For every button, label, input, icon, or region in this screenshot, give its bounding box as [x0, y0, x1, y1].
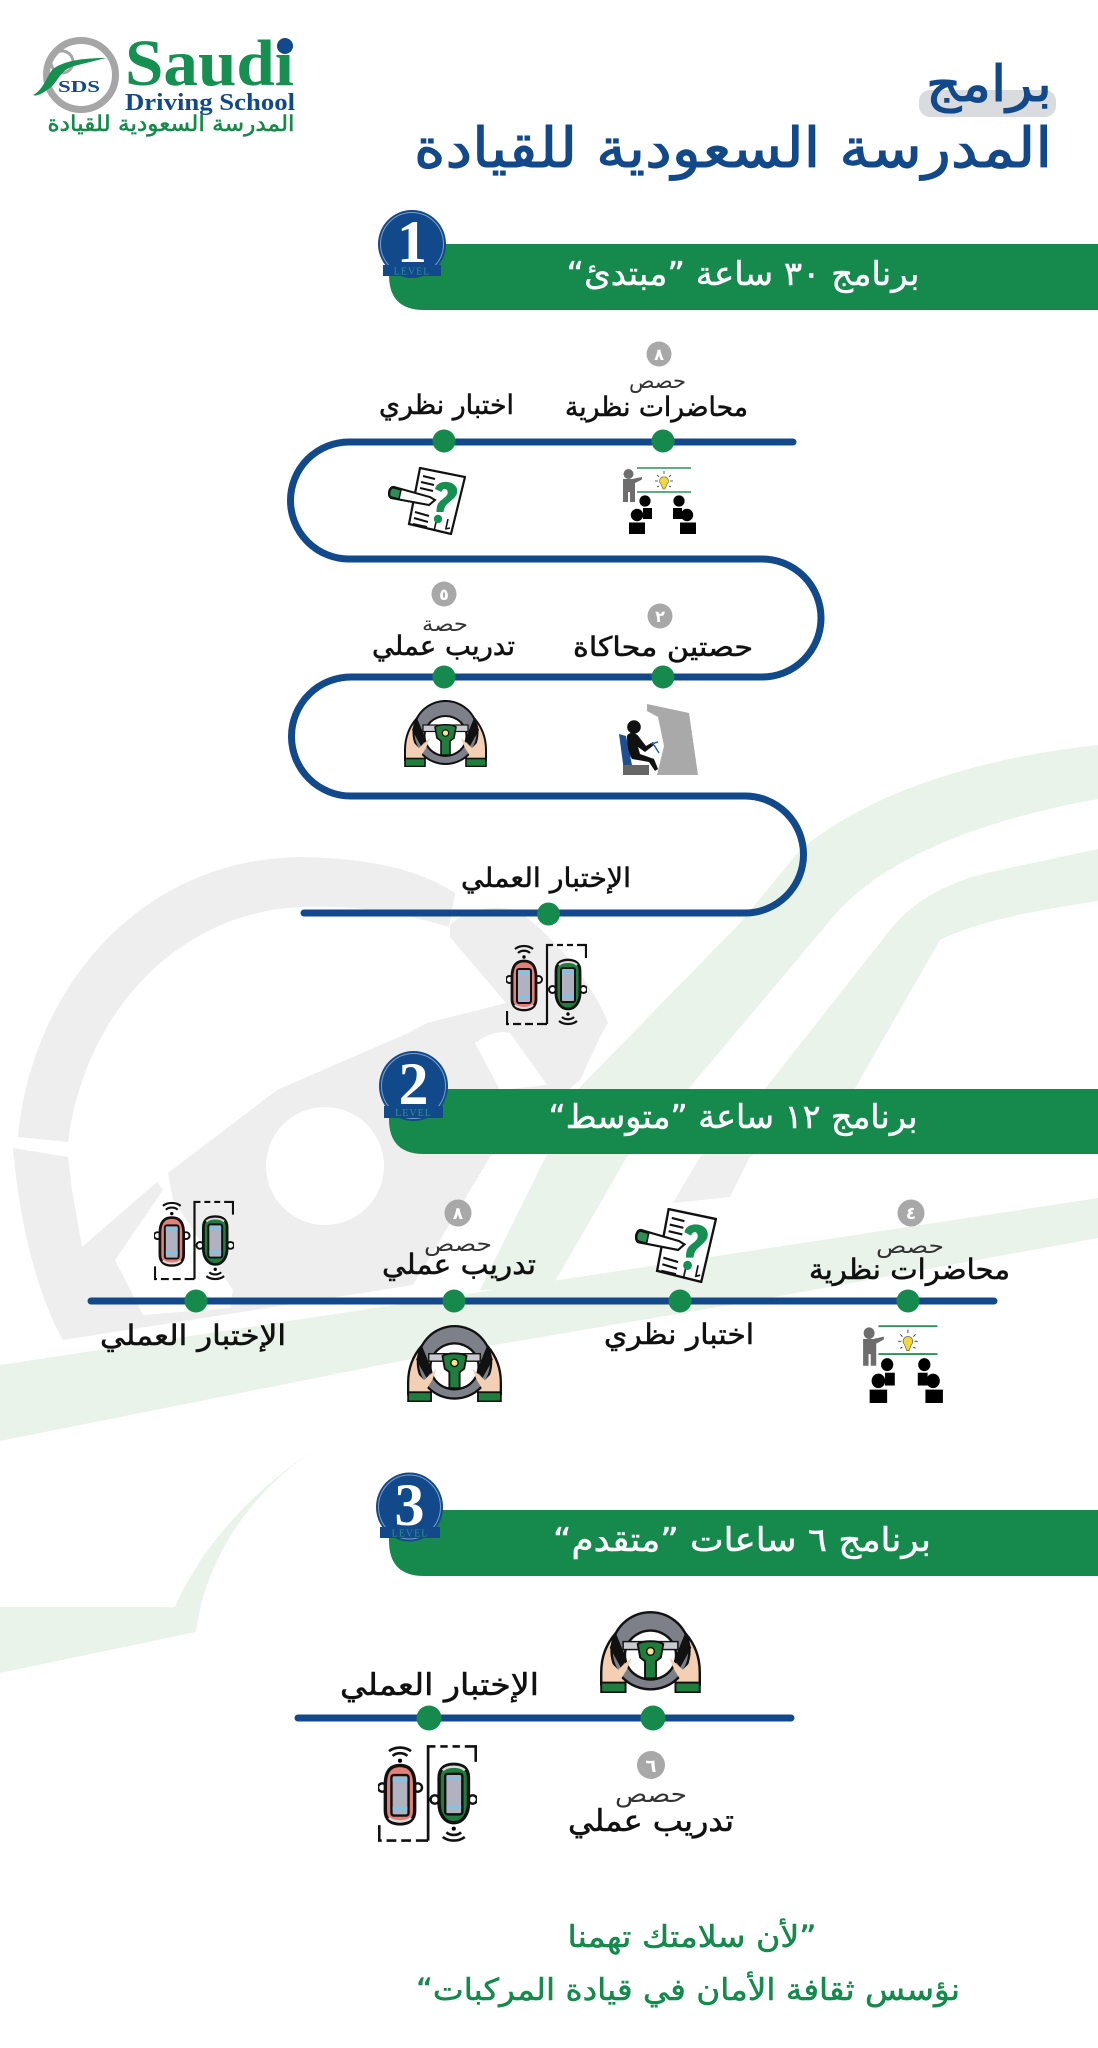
- step: practical training: تدريب عملي: [372, 631, 515, 662]
- step: theoretical test: [379, 390, 514, 534]
- step: training 8: حصص: [424, 1232, 492, 1256]
- banner: level 1: [389, 244, 1098, 310]
- background watermark: steering wheel and green swooshes: [0, 745, 1098, 1673]
- step: training 8: ٨: [453, 1204, 464, 1224]
- step: practical test: الإختبار العملي: [461, 863, 631, 894]
- step: training 8: [382, 1200, 536, 1401]
- badge: level 2: LEVEL: [395, 1108, 432, 1119]
- logo: Saudi Driving School: المدرسة السعودية للقيادة: [48, 112, 294, 137]
- banner: level 3: برنامج ٦ ساعات ”متقدم“: [553, 1520, 931, 1559]
- step: lectures 4: محاضرات نظرية: [809, 1253, 1010, 1286]
- banner: level 3: [389, 1510, 1098, 1576]
- step: theory test: [604, 1209, 754, 1351]
- badge: level 1: 1: [397, 209, 427, 275]
- banner: level 2: [389, 1089, 1098, 1154]
- logo: Saudi Driving School: Driving School: [125, 90, 295, 116]
- step: final practical exam: الإختبار العملي: [340, 1668, 539, 1703]
- badge: level 2: 2: [398, 1051, 428, 1117]
- step: simulation: [573, 604, 753, 775]
- badge: level 1: LEVEL: [394, 266, 430, 278]
- step: simulation: ٢: [655, 607, 665, 626]
- footer slogan: ”لأن سلامتك تهمنا: [568, 1917, 816, 1955]
- badge: level 3: 3: [394, 1472, 424, 1538]
- step: theoretical lectures: حصص: [629, 369, 686, 393]
- logo: Saudi Driving School: SDS: [58, 77, 100, 96]
- step: training 8: تدريب عملي: [382, 1248, 536, 1281]
- step: training 6: تدريب عملي: [568, 1804, 734, 1839]
- title: برامج: [926, 55, 1052, 114]
- title: المدرسة السعودية للقيادة: [414, 116, 1052, 180]
- footer slogan: نؤسس ثقافة الأمان في قيادة المركبات“: [416, 1970, 960, 2008]
- step: theoretical lectures: ٨: [654, 345, 664, 364]
- timeline line: level 3: [298, 1714, 791, 1722]
- step: training 6: ٦: [646, 1756, 656, 1777]
- step: practical training: [372, 582, 515, 766]
- timeline line: level 2: [91, 1298, 994, 1304]
- logo: Saudi Driving School: [33, 27, 295, 137]
- step: theoretical lectures: محاضرات نظرية: [565, 392, 748, 423]
- step: lectures 4: حصص: [876, 1234, 944, 1258]
- title: [414, 55, 1056, 180]
- step: practical training: حصة: [422, 612, 468, 636]
- step: training 6: حصص: [615, 1782, 687, 1808]
- title highlight: [919, 90, 1056, 117]
- step: theoretical lectures: [565, 342, 748, 534]
- footer slogan: [416, 1917, 960, 2008]
- step: training 6: [568, 1611, 734, 1839]
- step: practical exam: الإختبار العملي: [100, 1319, 286, 1352]
- step: theory test: اختبار نظري: [604, 1318, 754, 1351]
- step: lectures 4: ٤: [906, 1204, 916, 1224]
- step: simulation: حصتين محاكاة: [573, 632, 753, 663]
- step: theoretical test: اختبار نظري: [379, 390, 514, 421]
- banner: level 2: برنامج ١٢ ساعة ”متوسط“: [548, 1097, 918, 1136]
- badge: level 1: [378, 209, 446, 278]
- badge: level 3: LEVEL: [392, 1528, 428, 1540]
- badge: level 2: [379, 1051, 448, 1121]
- logo: Saudi Driving School: Saudi: [125, 27, 294, 100]
- step: final practical exam: [340, 1668, 539, 1841]
- banner: level 1: برنامج ٣٠ ساعة ”مبتدئ“: [566, 254, 920, 293]
- step: practical training: ٥: [439, 585, 449, 604]
- step: practical exam: [100, 1202, 286, 1352]
- step: practical test: [461, 863, 631, 1024]
- serpentine timeline path: [290, 442, 821, 913]
- badge: level 3: [376, 1472, 443, 1542]
- step: lectures 4: [809, 1200, 1010, 1403]
